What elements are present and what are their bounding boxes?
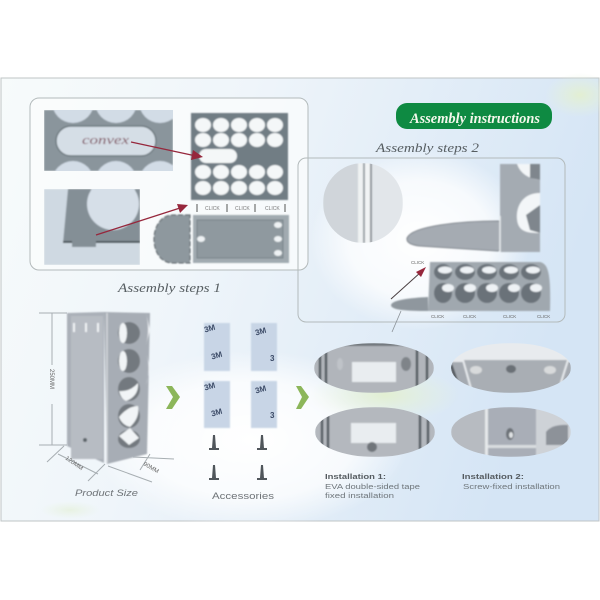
click labels: CLICK: [265, 206, 280, 212]
installation photo 1 bottom: [315, 407, 435, 457]
holder body: [67, 312, 150, 464]
installation photo 2 bottom: [451, 407, 571, 457]
accessories: adhesive tapes: 3M: [254, 326, 268, 337]
photo: clip tab detail: [44, 189, 140, 265]
detail circle: joint: [323, 163, 403, 243]
click labels panel 2: CLICK: [503, 314, 516, 319]
arrow: convex to slot: [131, 142, 203, 160]
installation photo 2 top: [451, 343, 571, 393]
click labels panel 2: CLICK: [463, 314, 476, 319]
arrow: chevron 2: [296, 386, 309, 409]
base plate: [154, 215, 289, 263]
title badge: Assembly instructions: [409, 111, 540, 127]
panel: assembly steps 2: [298, 158, 565, 332]
text: installation 1: EVA double-sided tape: [325, 482, 420, 491]
text: installation 1: [325, 472, 420, 500]
dimension: height: 250MM: [48, 369, 54, 389]
accessories: screws: [209, 435, 267, 480]
dimension: width: 120MM: [64, 456, 84, 472]
text: installation 2: Installation 2:: [462, 472, 524, 481]
accessories: adhesive tapes: 3M: [210, 350, 224, 361]
click labels panel 2: [411, 260, 550, 319]
accessories: adhesive tapes: [203, 323, 277, 428]
text: installation 2: [462, 472, 560, 491]
click labels: CLICK: [205, 206, 220, 212]
click labels panel 2: CLICK: [537, 314, 550, 319]
accessories: adhesive tapes: 3: [270, 354, 275, 363]
photo: convex detail: [44, 110, 173, 171]
arrow: tab to plate: [96, 204, 188, 235]
dimension: depth: 90MM: [142, 462, 159, 475]
text: installation 1: fixed installation: [325, 491, 394, 500]
panel: assembly steps 1: [30, 81, 308, 270]
side wall with base: [407, 164, 540, 252]
product drawing: [39, 312, 174, 482]
photo: convex detail: convex: [82, 132, 129, 147]
arrow: chevron 1: [166, 386, 180, 409]
dimension lines: [39, 313, 174, 482]
click labels panel 2: CLICK: [411, 260, 424, 265]
heading: assembly steps 1: Assembly steps 1: [117, 281, 221, 295]
click labels panel 2: CLICK: [431, 314, 444, 319]
click labels: CLICK: [235, 206, 250, 212]
accessories: adhesive tapes: 3M: [210, 407, 224, 418]
accessories: adhesive tapes: 3M: [203, 381, 217, 392]
perforated plate: [191, 113, 288, 200]
caption: product size: Product Size: [75, 488, 138, 499]
background frame: [1, 73, 600, 530]
title badge: [396, 103, 552, 129]
accessories: adhesive tapes: 3M: [203, 323, 217, 334]
installation photo 1 top: [314, 343, 434, 393]
assembled holder: [391, 262, 550, 311]
accessories: adhesive tapes: 3M: [254, 384, 268, 395]
text: installation 2: Screw-fixed installation: [463, 482, 560, 491]
text: installation 1: Installation 1:: [325, 472, 386, 481]
caption: accessories: Accessories: [212, 491, 274, 502]
arrow: click: [391, 267, 426, 299]
leader line: [392, 311, 401, 332]
accessories: adhesive tapes: 3: [270, 411, 275, 420]
click labels: [197, 204, 285, 212]
heading: assembly steps 2: Assembly steps 2: [375, 141, 479, 155]
